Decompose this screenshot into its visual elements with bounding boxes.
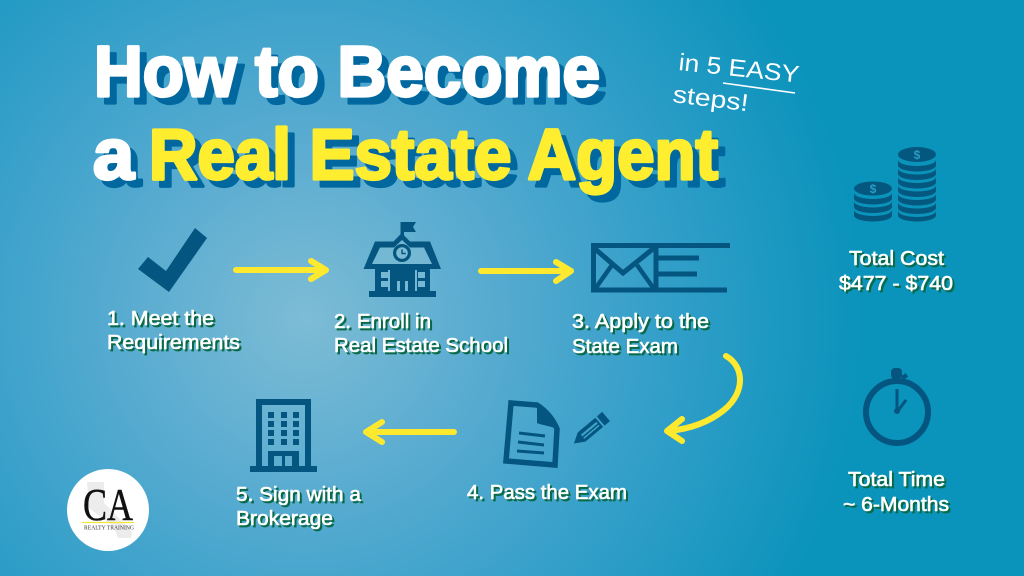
icon: check mark [138, 228, 207, 292]
total cost label: $477 - $740 [839, 273, 953, 295]
step 2 label: 2. Enroll in [336, 313, 433, 335]
total cost label [839, 248, 955, 297]
step 5 label: 5. Sign with a [238, 486, 364, 508]
title [93, 33, 725, 202]
step 3 label: State Exam [574, 338, 680, 360]
handwritten note [671, 49, 801, 117]
total time label: ~ 6-Months [843, 494, 949, 516]
icon: school [364, 222, 441, 297]
roof [364, 233, 441, 269]
pencil [570, 412, 610, 448]
step 1 label [107, 308, 242, 356]
arrow: step 1 to 2 [236, 261, 326, 279]
step 5 label: Brokerage [236, 508, 333, 530]
title line 1: How to Become [94, 33, 600, 112]
clock [393, 244, 411, 262]
title word a: a [93, 116, 135, 195]
step 2 label: 2. Enroll in [334, 311, 431, 333]
arrow: step 2 to 3 [481, 262, 571, 281]
step 3 label: State Exam [572, 336, 678, 358]
total time label: Total Time [850, 471, 947, 493]
icon: document and pencil [506, 403, 610, 465]
note line 2: steps! [671, 81, 750, 117]
step 3 label: 3. Apply to the [572, 311, 709, 333]
arrow: step 4 to 5 [366, 422, 454, 442]
step 3 label [572, 311, 711, 360]
step 1 label: Requirements [107, 332, 240, 354]
step 1 label: 1. Meet the [107, 308, 214, 330]
arrow: curved step 3 to 4 [667, 356, 740, 441]
icon: coin stacks [854, 147, 936, 222]
step 2 label [334, 311, 510, 359]
note underline [723, 83, 795, 93]
logo: CA Realty Training: REALTY TRAINING [84, 524, 134, 532]
logo: CA Realty Training: CA [83, 480, 133, 530]
total time label [843, 469, 951, 518]
step 1 label: Requirements [109, 334, 242, 356]
school body [375, 266, 430, 291]
step 4 label: 4. Pass the Exam [467, 482, 627, 504]
icon: office building [250, 399, 317, 472]
right coin stack: $ [914, 148, 921, 162]
total cost label: Total Cost [851, 250, 946, 272]
logo: CA Realty Training [67, 469, 149, 551]
step 5 label [236, 484, 364, 532]
total time label: ~ 6-Months [845, 496, 951, 518]
step 2 label: Real Estate School [336, 337, 510, 359]
document fold [537, 403, 560, 430]
step 3 label: 3. Apply to the [574, 313, 711, 335]
step 1 label: 1. Meet the [109, 310, 216, 332]
step 4 label: 4. Pass the Exam [469, 484, 629, 506]
base [369, 291, 436, 297]
icon: stopwatch [866, 368, 928, 443]
note line 1: in 5 EASY [677, 49, 801, 89]
step 2 label: Real Estate School [334, 335, 508, 357]
flag [400, 222, 404, 237]
step 5 label: 5. Sign with a [236, 484, 362, 506]
total cost label: $477 - $740 [841, 275, 955, 297]
document [506, 403, 557, 465]
icon: envelope application [591, 245, 730, 290]
title line 1 shadow: How to Become [101, 40, 607, 119]
title word a shadow: a [100, 123, 142, 202]
left coin stack: $ [870, 182, 877, 196]
title line 2 shadow: Real Estate Agent [156, 123, 725, 202]
document lines [517, 433, 545, 453]
total cost label: Total Cost [849, 248, 944, 270]
title highlighted words: Real Estate Agent [149, 116, 718, 195]
step 5 label: Brokerage [238, 510, 335, 532]
total time label: Total Time [848, 469, 945, 491]
